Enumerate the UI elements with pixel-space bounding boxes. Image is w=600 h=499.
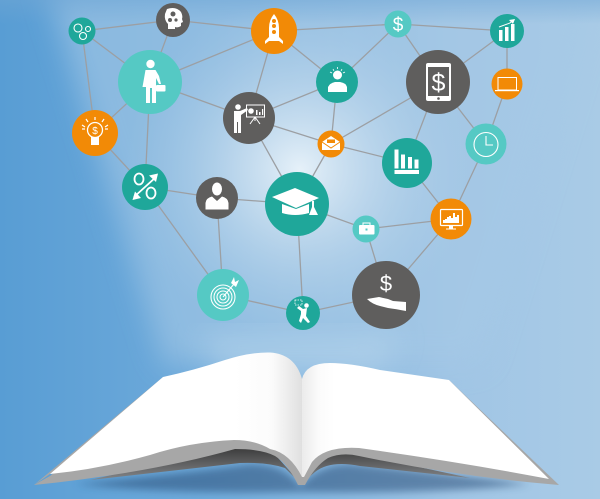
icon: monitor with chart [430,198,472,240]
icon: head with gears [156,3,190,37]
network connector lines [82,20,507,313]
icon: business person with briefcase [118,50,182,114]
icon: light bulb with dollar [72,110,118,156]
book page band [34,377,559,485]
icon: dollar coin [384,10,412,38]
book shadow [75,464,530,492]
icon: smartphone with dollar [406,50,470,114]
icon: winner with flag [286,296,320,330]
icon: person with idea [316,61,358,103]
right page [302,363,549,479]
open book [34,352,559,492]
icon: dollar coin: $ [393,15,404,36]
icon: gears [68,18,96,44]
icon: hand holding dollar: $ [380,271,392,296]
icon: hand holding dollar [352,261,420,329]
icon: laptop [492,68,522,100]
icon: rising chart [490,14,524,48]
icon: clock [466,124,506,164]
left page [50,352,302,477]
icon: target with arrow [197,269,249,321]
icon: user [196,177,238,219]
icon: presenter with board [223,92,275,144]
icon: briefcase [352,216,380,242]
icon: smartphone with dollar: $ [432,69,446,97]
icon: bar chart [382,138,432,188]
icon: light bulb with dollar: $ [92,126,98,137]
book inner dark pages [90,447,470,484]
icon: percent with arrows [122,164,168,210]
icon: rocket [251,8,297,54]
icon: graduation cap [265,172,329,236]
icon: envelope [318,130,344,158]
